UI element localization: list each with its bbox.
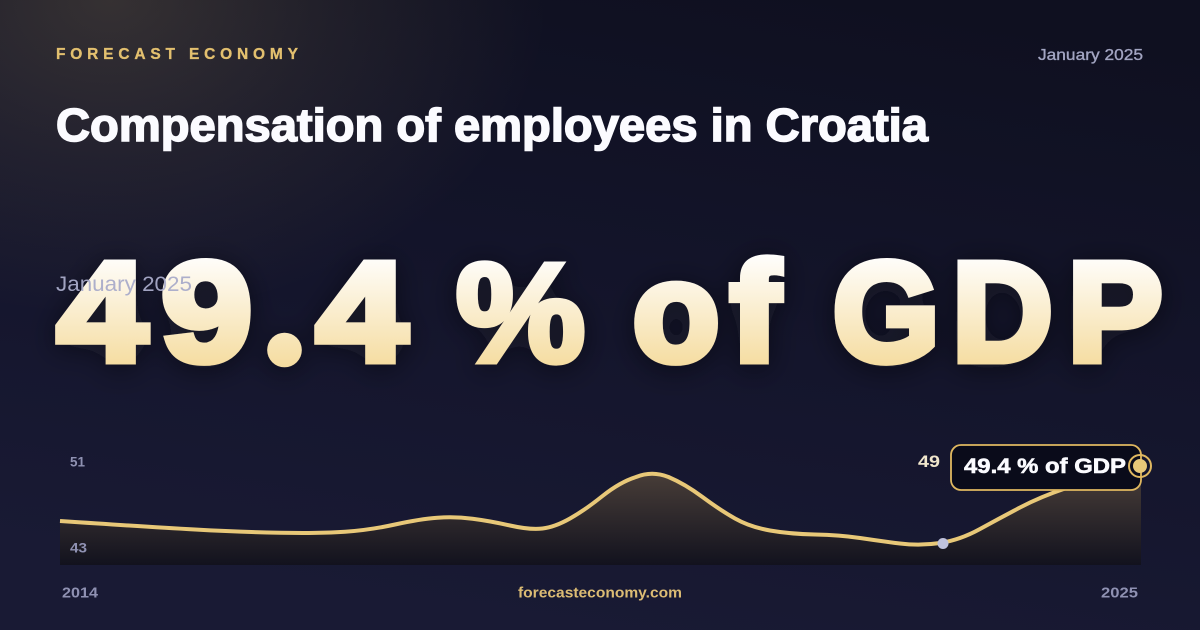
brand eyebrow: FORECAST ECONOMY	[56, 46, 299, 63]
main value: f	[730, 233, 781, 391]
callout: latest value	[951, 445, 1141, 490]
main value: 9	[161, 234, 252, 391]
main value	[57, 232, 1163, 392]
y axis max label: 51	[70, 454, 85, 470]
main value: 4	[57, 234, 147, 391]
x axis end label: 2025	[1101, 586, 1138, 602]
date overlapping value: January 2025	[56, 273, 192, 296]
source url: forecasteconomy.com	[518, 586, 682, 602]
date top right: January 2025	[1038, 47, 1143, 64]
main value: o	[633, 233, 720, 390]
main value: D	[952, 233, 1053, 391]
main value: 4	[316, 234, 407, 391]
trend line	[60, 466, 1141, 545]
callout: latest value: 49.4 % of GDP	[964, 454, 1126, 478]
latest point marker	[1129, 455, 1151, 477]
main value: %	[456, 235, 585, 392]
x axis start label: 2014	[62, 586, 98, 602]
area under line	[60, 466, 1141, 565]
main value: P	[1068, 234, 1163, 391]
y axis min label: 43	[70, 540, 87, 556]
previous value label: 49	[918, 452, 940, 471]
line chart	[60, 445, 1151, 565]
main value: .	[265, 232, 304, 390]
low point marker	[938, 538, 948, 549]
title: Compensation of employees in Croatia	[56, 99, 929, 151]
main value: G	[833, 234, 940, 391]
